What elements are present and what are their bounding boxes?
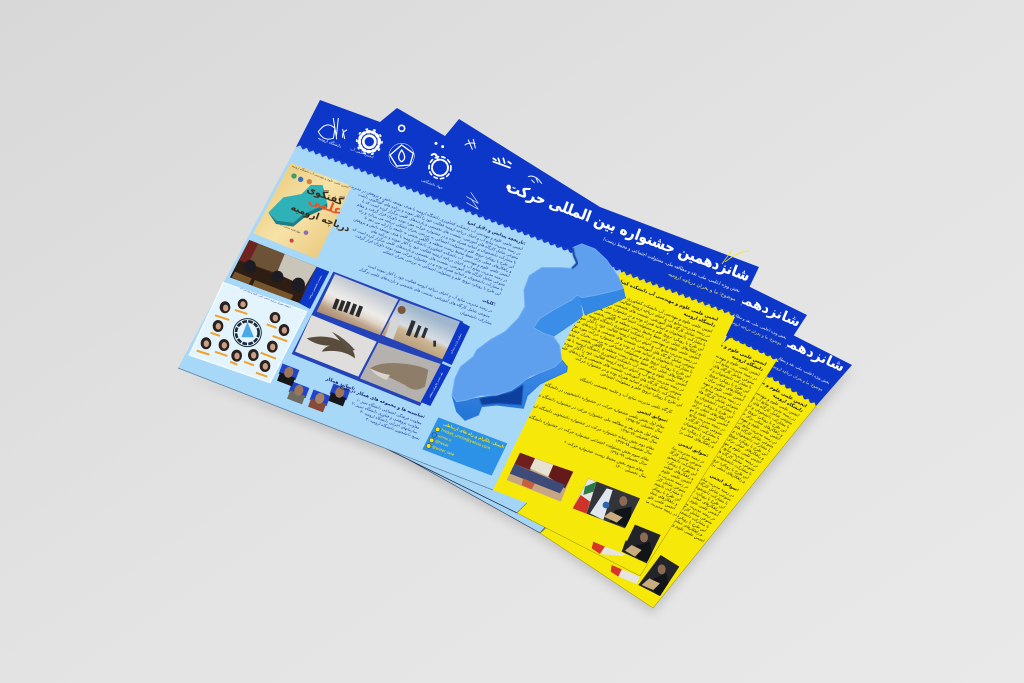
small logo marks bbox=[399, 125, 511, 189]
sheet 3 body text: این طرح با رویکرد ترویج علم و مسئولیت اجتماعی به بررسی بحران خشکی دریاچه می پردازد bbox=[562, 451, 708, 533]
light blue paragraph: history: با مشارکت دانشجویان و اساتید همراه بوده و در جشنواره حرکت مورد توجه داوران قرار گرفت و مقام bbox=[356, 202, 517, 265]
sheet 2 body text: و راهکارهای عملی برای حفظ محیط زیست منطقه و آگاهی بخشی به جامعه را ارائه می دهد تا bbox=[580, 352, 732, 423]
sheet 2 body text: متنوعی شامل کارگاه های آموزشی، نشست های تخصصی و بازدیدهای علمی برگزار کرده است که bbox=[566, 362, 724, 436]
label: second photos caption: تلف شدن جانوران منطقه bbox=[428, 372, 444, 398]
panel: association team bbox=[189, 283, 307, 383]
sheet 3 body text: این طرح با رویکرد ترویج علم و مسئولیت اجتماعی به بررسی بحران خشکی دریاچه می پردازد bbox=[624, 374, 769, 457]
association heading and paragraph: متنوعی شامل کارگاه های آموزشی، نشست های تخصصی و بازدیدهای علمی برگزار کرده bbox=[537, 335, 683, 397]
sheet 2 body text: با مشارکت دانشجویان و اساتید همراه بوده و در جشنواره حرکت مورد توجه داوران قرار گرفت bbox=[548, 401, 701, 472]
poster: scientific talk on the lake: گفتگوی bbox=[305, 182, 346, 208]
header small logos right bbox=[467, 176, 542, 209]
sheet 2 body text: در زمینه مدیریت منابع آب و احیای دریاچه ارومیه فعالیت خود را آغاز نموده و برنامه های bbox=[565, 397, 706, 464]
front light blue panel bbox=[178, 147, 623, 490]
association heading and paragraph: با مشارکت دانشجویان و اساتید همراه بوده و در جشنواره حرکت bbox=[575, 356, 681, 401]
association record list: سال تحصیلی ۱۴۰۰ bbox=[614, 463, 648, 479]
contact details: urmia.ir bbox=[437, 434, 452, 443]
front blue header bbox=[296, 100, 759, 317]
sheet 3 yellow body bbox=[540, 377, 816, 608]
left panel images bbox=[189, 163, 352, 383]
association heading and paragraph: این طرح با رویکرد ترویج علم و مسئولیت اجتماعی به بررسی بحران خشکی دریاچه می پردازد bbox=[551, 287, 705, 352]
map dark recess bbox=[479, 384, 523, 405]
sheet 2 light blue edge bbox=[385, 445, 550, 513]
association heading and paragraph: این طرح با رویکرد ترویج علم و مسئولیت اجتماعی به بررسی بحران خشکی دریاچه می پردازد bbox=[538, 314, 692, 379]
association heading and paragraph: در زمینه مدیریت منابع آب و احیای دریاچه ارومیه فعالیت خود را آغاز نموده و برنامه های bbox=[568, 278, 711, 338]
sheet 2 body text: این طرح با رویکرد ترویج علم و مسئولیت اجتماعی به بررسی بحران خشکی دریاچه می پردازد bbox=[583, 348, 734, 419]
sheet 2 body text: و راهکارهای عملی برای حفظ محیط زیست منطقه و آگاهی بخشی به جامعه را ارائه می دهد تا bbox=[564, 377, 716, 449]
label: first photos caption: تصاویر بازدید میدانی bbox=[450, 333, 463, 354]
3D map of Lake Urmia bbox=[452, 244, 625, 420]
portrait: professor four bbox=[276, 364, 299, 387]
logo: university crest: دانشگاه ارومیه bbox=[317, 135, 343, 149]
poster: scientific talk on the lake bbox=[253, 163, 352, 259]
sheet 2 body text: در زمینه مدیریت منابع آب و احیای دریاچه ارومیه فعالیت خود را آغاز نموده و برنامه های bbox=[617, 315, 759, 381]
sheet 2 body text: این طرح با رویکرد ترویج علم و مسئولیت اجتماعی به بررسی بحران خشکی دریاچه می پردازد bbox=[567, 374, 718, 444]
achievements text block: ۱- معاونت فرهنگی اجتماعی دانشگاه سبز bbox=[356, 397, 423, 425]
association record list: • مقام اول بخش علمی جشنواره حرکت در جشنواره دانشجویی در دانشگاه تهران bbox=[530, 377, 666, 429]
sheet 3 body text: با مشارکت دانشجویان و اساتید همراه بوده و در جشنواره حرکت مورد توجه داوران قرار گرفت bbox=[625, 370, 772, 453]
sheet 3 body text: با مشارکت دانشجویان و اساتید همراه بوده و در جشنواره حرکت مورد توجه داوران قرار گرفت bbox=[606, 393, 753, 476]
festival title: شانزدهمین جشنواره بین المللی حرکت bbox=[505, 178, 753, 285]
light blue paragraph: history: کلیات: bbox=[481, 298, 497, 308]
sheet 3 body text: متنوعی شامل کارگاه های آموزشی، نشست های تخصصی و بازدیدهای علمی برگزار کرده است که bbox=[581, 416, 733, 502]
issue topic line: موضوع: ما و بحران دریاچه ارومیه bbox=[667, 271, 737, 303]
sheet 2 award photo bbox=[592, 523, 661, 563]
sheet 2 body text: این طرح با رویکرد ترویج علم و مسئولیت اجتماعی به بررسی بحران خشکی دریاچه می پردازد bbox=[547, 406, 698, 477]
sheet 2 body text: با مشارکت دانشجویان و اساتید همراه بوده و در جشنواره حرکت مورد توجه داوران قرار گرفت bbox=[585, 343, 737, 415]
association heading and paragraph: در زمینه مدیریت منابع آب و احیای دریاچه ارومیه فعالیت خود را آغاز نموده و برنامه های bbox=[542, 332, 685, 392]
association heading and paragraph: متنوعی شامل کارگاه های آموزشی، نشست های تخصصی و بازدیدهای علمی برگزار کرده است که bbox=[549, 276, 709, 343]
map notch shadow bbox=[572, 248, 577, 268]
sheet 3 body text: در زمینه مدیریت منابع آب و احیای دریاچه ارومیه فعالیت خود را آغاز نموده و برنامه های bbox=[581, 444, 717, 521]
sheet 3 body text: متنوعی شامل کارگاه های آموزشی، نشست های تخصصی و بازدیدهای علمی برگزار کرده است که bbox=[562, 439, 714, 525]
label: first photos caption bbox=[442, 322, 470, 365]
poster: scientific talk on the lake: علمی bbox=[307, 192, 345, 218]
sheet 3 title: شانزدهمین جشنواره bbox=[711, 301, 847, 376]
light blue paragraph: history: این طرح با رویکرد ترویج علم و مسئولیت اجتماعی به بررسی بحران خشکی bbox=[382, 248, 502, 296]
sheet 3 body text: و راهکارهای عملی برای حفظ محیط زیست منطقه و آگاهی بخشی به جامعه را ارائه می دهد تا bbox=[638, 354, 785, 437]
association record list: سوابق انجمن: bbox=[636, 409, 669, 424]
sheet 3 body text: متنوعی شامل کارگاه های آموزشی، نشست های تخصصی و بازدیدهای علمی برگزار کرده است که bbox=[642, 340, 794, 425]
association heading and paragraph: و راهکارهای عملی برای حفظ محیط زیست منطقه و آگاهی بخشی به جامعه را ارائه می دهد تا bbox=[548, 291, 703, 356]
association heading and paragraph: انجمن علمی علوم و مهندسی آب دانشکده کشاورزی bbox=[608, 274, 719, 323]
association record list: • مقام اول بخش نقد و مطالعه ملی جشنواره حرکت در جشنواره دانشگاه تهران bbox=[528, 388, 661, 440]
sheet 3 body text: انجمن علمی علوم و مهندسی آب دانشکده کشاورزی دانشگاه ارومیه با هدف توسعه دانش و پژوهش bbox=[627, 354, 782, 441]
yellow panel body text bbox=[529, 280, 718, 478]
map neck side bbox=[533, 295, 583, 337]
sheet 2 body text: متنوعی شامل کارگاه های آموزشی، نشست های تخصصی و بازدیدهای علمی برگزار کرده است که bbox=[582, 337, 740, 411]
photo: dead fox in salt bbox=[360, 343, 441, 403]
map side faces bbox=[452, 360, 567, 420]
photo: award winner with flags bbox=[573, 478, 640, 528]
logo: ornate flower: جهاد دانشگاهی bbox=[421, 177, 444, 190]
sheet 3 body text: در زمینه مدیریت منابع آب و احیای دریاچه ارومیه فعالیت خود را آغاز نموده و برنامه های bbox=[600, 421, 736, 498]
sheet 3 body text: و راهکارهای عملی برای حفظ محیط زیست منطقه و آگاهی بخشی به جامعه را ارائه می دهد تا bbox=[601, 401, 747, 484]
portrait: professor three bbox=[286, 382, 309, 405]
sheet 2 body text: با مشارکت دانشجویان و اساتید همراه بوده و در جشنواره حرکت مورد توجه داوران قرار گرفت bbox=[569, 369, 721, 440]
sheet 2 body text: و راهکارهای عملی برای حفظ محیط زیست منطقه و آگاهی بخشی به جامعه را ارائه می دهد تا bbox=[543, 409, 695, 481]
label: panel discussion caption bbox=[299, 267, 329, 309]
flyer sheet 3 (rear) bbox=[407, 335, 852, 608]
sheet 3 body text: متنوعی شامل کارگاه های آموزشی، نشست های تخصصی و بازدیدهای علمی برگزار کرده است که bbox=[604, 386, 757, 472]
team portraits bbox=[201, 299, 289, 372]
sheet 2 body text: در زمینه مدیریت منابع آب و احیای دریاچه ارومیه فعالیت خود را آغاز نموده و برنامه های bbox=[537, 450, 679, 517]
light blue paragraph: history: تاریخچه پیدایش و دلایل احیا: bbox=[466, 221, 526, 247]
contact heading: ایمیل، تلگرام و راه های ارتباطی: bbox=[443, 421, 506, 449]
association record list: سال تحصیلی ۹۷-۱۳۹۶ bbox=[620, 427, 659, 445]
logotype flourish bbox=[722, 250, 749, 264]
photo: group of students on stage bbox=[507, 453, 573, 502]
sheet 3 body text: انجمن علمی علوم و مهندسی آب دانشکده کشاورزی دانشگاه ارومیه با هدف توسعه دانش و پژوهش bbox=[565, 430, 720, 517]
association heading and paragraph: انجمن علمی علوم و مهندسی آب دانشکده کشاورزی دانشگاه ارومیه با هدف توسعه دانش و پژوهش bbox=[550, 265, 713, 334]
sheet 2 title: شانزدهمین جشنواره bbox=[665, 260, 803, 331]
sheet 3 zigzag bbox=[768, 375, 821, 409]
association record list: • مقام سوم بخش محیط زیست جشنواره حرکت bbox=[563, 439, 645, 473]
sheet 2 body text: انجمن علمی علوم و مهندسی آب دانشکده کشاورزی دانشگاه ارومیه با هدف توسعه دانش و پژوهش bbox=[600, 302, 761, 377]
sheet 3 body text: در زمینه مدیریت منابع آب و احیای دریاچه ارومیه فعالیت خود را آغاز نموده و برنامه های bbox=[624, 391, 760, 468]
sheet 3 body text: دانشگاه ارومیه bbox=[771, 392, 805, 414]
flyer sheet 1 (front) bbox=[178, 100, 759, 541]
sheet 3 editor line: موضوع: ما و بحران دریاچه ارومیه bbox=[771, 363, 824, 392]
sheet 3 body text: و راهکارهای عملی برای حفظ محیط زیست منطقه و آگاهی بخشی به جامعه را ارائه می دهد تا bbox=[619, 378, 766, 460]
map lobe side bbox=[577, 288, 625, 315]
achievements text block: ۴- بسیج دانشجویی دانشگاه ارومیه bbox=[365, 416, 421, 441]
photo collage bbox=[292, 272, 470, 406]
logo: university crest bbox=[317, 118, 347, 149]
label: second photos caption bbox=[421, 363, 451, 406]
association heading and paragraph: با مشارکت دانشجویان و اساتید همراه بوده و در جشنواره حرکت مورد توجه داوران قرار گرفت bbox=[552, 282, 707, 347]
light blue paragraph: history: در زمینه مدیریت منابع آب و احیای دریاچه ارومیه فعالیت خود را آغاز نموده و برنامه های گوناگونی داشت bbox=[358, 192, 522, 256]
sheet 2 body text: در زمینه مدیریت منابع آب و احیای دریاچه ارومیه فعالیت خود را آغاز نموده و برنامه های bbox=[585, 365, 726, 432]
sheet 3 body text: این طرح با رویکرد ترویج علم و مسئولیت اجتماعی به بررسی بحران خشکی دریاچه می پردازد bbox=[581, 427, 726, 509]
sheet 3 body text: این طرح با رویکرد ترویج علم و مسئولیت اجتماعی به بررسی بحران خشکی دریاچه می پردازد bbox=[605, 398, 750, 480]
sheet 3 body text: انجمن علمی علوم و مهندسی آب دانشکده کشاورزی دانشگاه ارومیه با هدف توسعه دانش و پژوهش bbox=[645, 330, 801, 418]
contact box bbox=[422, 417, 507, 476]
sheet 2 body text: با مشارکت دانشجویان و اساتید همراه بوده و در جشنواره حرکت مورد توجه داوران قرار گرفت bbox=[601, 318, 753, 390]
lower sheet edge bbox=[178, 368, 493, 490]
sheet 2 body text: در زمینه مدیریت منابع آب و احیای دریاچه ارومیه فعالیت خود را آغاز نموده و برنامه های bbox=[549, 423, 690, 489]
photo: panel discussion on stage bbox=[230, 240, 317, 303]
team name tags bbox=[197, 310, 287, 377]
festival subtitle: بخش ویژه (علمی، ملی، نقد و مطالعه ملی، مسئولیت اجتماعی و محیط زیست) bbox=[602, 236, 741, 294]
sheet 2 body text: انجمن علمی علوم و مهندسی آب دانشکده کشاورزی دانشگاه ارومیه با هدف توسعه دانش و پژوهش bbox=[568, 352, 729, 428]
sheet 2 body text: و راهکارهای عملی برای حفظ محیط زیست منطقه و آگاهی بخشی به جامعه را ارائه می دهد تا bbox=[596, 327, 748, 398]
light blue paragraph: history: با مشارکت دانشجویان و اساتید همراه بوده و در جشنواره حرکت مورد توجه داوران قرار گرفت bbox=[355, 233, 504, 292]
association heading and paragraph: این طرح با رویکرد ترویج علم و مسئولیت اجتماعی bbox=[600, 371, 683, 408]
logo: ornate flower bbox=[421, 154, 451, 190]
light blue paragraph: history: و راهکارهای عملی برای حفظ محیط زیست منطقه و آگاهی بخشی به جامعه را ارائه می دهد تا bbox=[364, 215, 513, 274]
achievements text block: شایسته ها و مجموعه های همکار در طرح: bbox=[339, 384, 426, 420]
soft shadow under the flyers bbox=[178, 366, 856, 614]
logo: sun rosette bbox=[350, 129, 382, 159]
light blue zigzag edge bbox=[296, 144, 622, 273]
photo: dead bird in salt bbox=[295, 315, 377, 377]
sheet 2 body text: دانشگاه ارومیه bbox=[730, 353, 765, 373]
sheet 3 body text: با مشارکت دانشجویان و اساتید همراه بوده و در جشنواره حرکت مورد توجه داوران قرار گرفت bbox=[644, 346, 791, 429]
poster: scientific talk on the lake: چهارشنبه ساعت ۱۶ bbox=[279, 224, 301, 234]
association heading and paragraph: انجمن علمی علوم و مهندسی آب دانشکده کشاورزی دانشگاه ارومیه با هدف توسعه دانش و پژوهش bbox=[524, 319, 687, 388]
icon: association gear emblem bbox=[233, 319, 261, 347]
association record list: • مقام دوم بخش رسانه جشنواره حرکت در جشنواره دانشجویی دانشگاه ارومیه bbox=[523, 399, 655, 451]
association heading and paragraph: انجمن علمی علوم و مهندسی آب دانشکده کشاورزی دانشگاه ارومیه با هدف توسعه دانش و پژوهش bbox=[537, 292, 700, 361]
sheet 3 light blue edge bbox=[395, 450, 570, 533]
contact details: @hekat bbox=[435, 439, 450, 448]
co-workers portraits bbox=[276, 364, 350, 413]
contact details: hrekat_urmia@yahoo.com bbox=[441, 427, 491, 451]
front yellow panel bbox=[493, 273, 735, 541]
contact details: @water_lake bbox=[432, 445, 456, 457]
sheet 2 body text: متنوعی شامل کارگاه های آموزشی، نشست های تخصصی و بازدیدهای علمی برگزار کرده است که bbox=[598, 311, 756, 385]
panel: association team: اعضای شورای مرکزی انجمن علمی علوم و مهندسی آب bbox=[239, 287, 291, 309]
light blue paragraph: history: در زمینه مدیریت منابع آب و احیای دریاچه ارومیه فعالیت خود را آغاز نموده و برنامه های bbox=[370, 228, 509, 283]
sheet 2 editor line: موضوع: ما و بحران دریاچه ارومیه bbox=[729, 319, 783, 346]
sheet 3 body text: با مشارکت دانشجویان و اساتید همراه بوده و در جشنواره حرکت مورد توجه داوران قرار گرفت bbox=[583, 423, 730, 506]
contact details bbox=[432, 427, 491, 457]
poster: scientific talk on the lake: دریاچه ارومیه bbox=[289, 202, 352, 235]
association record list: کارگاه علمی مدیریت منابع آب و جلسه تخصصی دانشگاه bbox=[579, 376, 673, 414]
sheet 2 body text: متنوعی شامل کارگاه های آموزشی، نشست های تخصصی و بازدیدهای علمی برگزار کرده است که bbox=[530, 420, 687, 494]
logo: gear and water drop bbox=[389, 143, 414, 169]
sheet 3 body text: سوابق انجمن: bbox=[708, 474, 740, 493]
light blue paragraph: history: متنوعی شامل کارگاه های آموزشی، نشست های تخصصی و بازدیدهای علمی برگزار کرده است که با bbox=[361, 198, 520, 260]
collage frame bbox=[292, 272, 463, 406]
sheet 3 blue header bbox=[720, 310, 852, 406]
co-workers heading: اساتید همکار: bbox=[324, 375, 356, 392]
association heading and paragraph: و راهکارهای عملی برای حفظ محیط زیست منطقه و آگاهی بخشی به جامعه را ارائه می دهد تا bbox=[535, 318, 689, 383]
photo: walking on the shore bbox=[382, 300, 460, 359]
sheet 3 body text: انجمن علمی علوم و مهندسی آب دانشکده کشاورزی bbox=[702, 348, 808, 409]
portrait: professor one bbox=[327, 384, 350, 407]
light blue paragraph: history: این طرح با رویکرد ترویج علم و مسئولیت اجتماعی به بررسی بحران خشکی دریاچه می پردازد و راه bbox=[358, 208, 515, 269]
sheet 3 body text: این طرح با رویکرد ترویج علم و مسئولیت اجتماعی به بررسی بحران خشکی دریاچه می پردازد bbox=[642, 351, 788, 433]
photo: team on the dry lake bbox=[317, 274, 398, 335]
yellow zigzag edge bbox=[620, 270, 735, 317]
sheet 2 body text: متنوعی شامل کارگاه های آموزشی، نشست های تخصصی و بازدیدهای علمی برگزار کرده است که bbox=[546, 394, 703, 468]
sheet 3 body text: و راهکارهای عملی برای حفظ محیط زیست منطقه و آگاهی بخشی به جامعه را ارائه می دهد تا bbox=[577, 431, 723, 513]
sheet 3 body text: متنوعی شامل کارگاه های آموزشی، نشست های تخصصی و بازدیدهای علمی برگزار کرده است که bbox=[623, 363, 775, 449]
header logos bbox=[317, 118, 511, 190]
sheet 2 body text: انجمن علمی علوم و مهندسی آب دانشکده کشاورزی دانشگاه ارومیه با هدف توسعه دانش و پژوهش bbox=[584, 327, 745, 402]
sheet 3 body text: انجمن علمی علوم و مهندسی آب دانشکده کشاورزی دانشگاه ارومیه با هدف توسعه دانش و پژوهش bbox=[608, 377, 763, 464]
light blue paragraph: history: متنوعی شامل کارگاه های آموزشی، نشست های تخصصی و بازدیدهای علمی برگزار کرده است که bbox=[352, 227, 506, 287]
map top face bbox=[452, 244, 623, 402]
yellow panel photos bbox=[507, 453, 640, 528]
association heading and paragraph: با مشارکت دانشجویان و اساتید همراه بوده و در جشنواره حرکت مورد توجه داوران قرار گرفت bbox=[539, 309, 694, 374]
sheet 3 body text: با مشارکت دانشجویان و اساتید همراه بوده و در جشنواره حرکت مورد توجه داوران قرار گرفت bbox=[564, 446, 711, 529]
sheet 2 body text: با مشارکت دانشجویان و اساتید همراه بوده و در جشنواره حرکت مورد توجه داوران قرار گرفت bbox=[532, 426, 685, 498]
association heading and paragraph: متنوعی شامل کارگاه های آموزشی، نشست های تخصصی و بازدیدهای علمی برگزار کرده است که bbox=[536, 303, 696, 370]
sheet 3 body text: در زمینه مدیریت منابع آب و احیای دریاچه ارومیه فعالیت خود را آغاز نموده و برنامه های bbox=[661, 344, 797, 422]
logo: sun rosette: انجمن علمی آب bbox=[350, 146, 375, 159]
sheet 3 body text: در زمینه مدیریت منابع آب و احیای دریاچه ارومیه فعالیت خود را آغاز نموده و برنامه های bbox=[642, 368, 779, 445]
flyer sheet 2 (middle) bbox=[385, 260, 807, 576]
sheet 2 body text: این طرح با رویکرد ترویج علم و مسئولیت اجتماعی به بررسی بحران خشکی دریاچه می پردازد bbox=[531, 431, 682, 502]
contact icons bbox=[426, 427, 440, 448]
association record list: • مقام سوم بخش مسئولیت اجتماعی جشنواره حرکت در جشنواره دانشگاه bbox=[525, 413, 650, 462]
light blue paragraph: history: مشارکت دانشجویان bbox=[459, 310, 493, 326]
light blue paragraph: history: انجمن علمی علوم و مهندسی آب دانشکده کشاورزی دانشگاه ارومیه با هدف توسعه دانش و پژوهش در مدیریت bbox=[349, 183, 524, 251]
achievements text block: ۳- سازمانهای اجرایی دانشگاه ارومیه bbox=[359, 409, 419, 435]
sheet 2 body text: سوابق انجمن: bbox=[677, 441, 709, 459]
association record list: سال تحصیلی ۹۶-۱۳۹۵ bbox=[625, 416, 664, 434]
sheet 3 body text: انجمن علمی علوم و مهندسی آب دانشکده کشاورزی دانشگاه ارومیه با هدف توسعه دانش و پژوهش bbox=[551, 456, 706, 543]
sheet 2 body text: انجمن علمی علوم و مهندسی آب دانشکده کشاورزی bbox=[657, 314, 768, 368]
sheet 2 body text: انجمن علمی علوم و مهندسی آب دانشکده کشاورزی دانشگاه ارومیه با هدف توسعه دانش و پژوهش bbox=[516, 435, 677, 510]
sheet 2 body text: و راهکارهای عملی برای حفظ محیط زیست منطقه و آگاهی بخشی به جامعه را ارائه می دهد تا bbox=[527, 435, 679, 506]
portrait: professor two bbox=[307, 390, 330, 413]
sheet 3 award photo bbox=[611, 555, 679, 597]
light blue paragraph: history: در زمینه مدیریت منابع آب و احیای دریاچه ارومیه فعالیت خود را آغاز نموده است bbox=[367, 263, 494, 313]
poster: scientific talk on the lake: انجمن علمی علوم و مهندسی آب دانشگاه ارومیه bbox=[291, 164, 349, 190]
label: panel discussion caption: نشست تخصصی دریاچه bbox=[308, 275, 323, 299]
light blue paragraph: history: متنوعی شامل کارگاه های آموزشی، نشست های تخصصی و بازدیدهای علمی برگزار bbox=[358, 266, 491, 318]
sheet 2 subtitle: بخش ویژه (علمی، ملی، نقد و مطالعه) bbox=[729, 310, 788, 340]
sheet 2 body text: انجمن علمی علوم و مهندسی آب دانشکده کشاورزی دانشگاه ارومیه با هدف توسعه دانش و پژوهش bbox=[532, 410, 693, 485]
sheet 3 body text: و راهکارهای عملی برای حفظ محیط زیست منطقه و آگاهی بخشی به جامعه را ارائه می دهد تا bbox=[558, 454, 704, 537]
sheet 2 blue header bbox=[700, 260, 807, 361]
sheet 2 zigzag bbox=[728, 336, 780, 363]
association record list: سال تحصیلی ۹۹-۱۳۹۸ bbox=[609, 449, 649, 467]
association record list: سال تحصیلی ۹۸-۱۳۹۷ bbox=[614, 438, 654, 456]
association heading and paragraph: دانشگاه ارومیه bbox=[682, 310, 717, 329]
light blue paragraph: history: انجمن علمی علوم و مهندسی آب دانشکده کشاورزی دانشگاه ارومیه با هدف توسعه دانش و پژوهش bbox=[353, 217, 511, 278]
sheet 2 body text: این طرح با رویکرد ترویج علم و مسئولیت اجتماعی به بررسی بحران خشکی دریاچه می پردازد bbox=[599, 323, 750, 394]
sheet 2 yellow body bbox=[517, 338, 777, 576]
sheet 3 subtitle: بخش ویژه (علمی، ملی، نقد و مطالعه) bbox=[773, 353, 831, 385]
association heading and paragraph: در زمینه مدیریت منابع آب و احیای دریاچه ارومیه فعالیت خود را آغاز نموده و برنامه های bbox=[555, 305, 698, 365]
sheet 2 body text: در زمینه مدیریت منابع آب و احیای دریاچه ارومیه فعالیت خود را آغاز نموده و برنامه های bbox=[601, 340, 742, 407]
achievements text block: ۲- معاونت پژوهشی و فناوری دانشگاه تبریز bbox=[351, 401, 421, 430]
